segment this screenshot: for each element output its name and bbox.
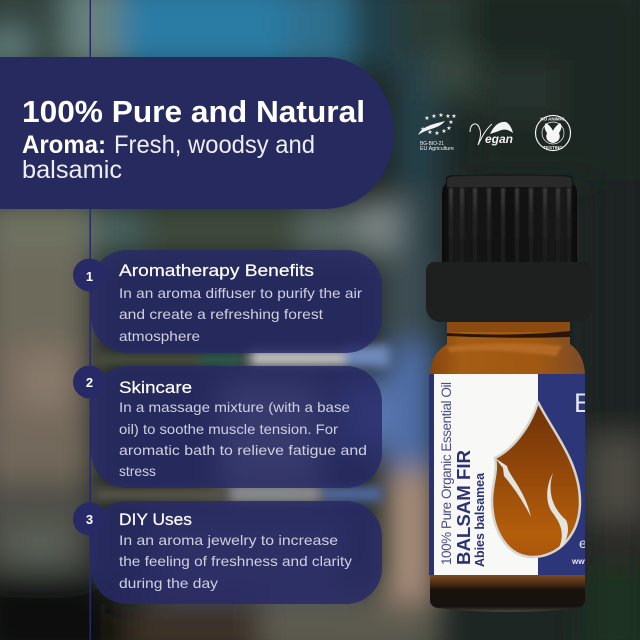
icon: no animal testing: TESTING	[543, 145, 563, 150]
icon: EU organic leaf: ★	[451, 113, 457, 120]
label: rotated product text	[439, 382, 487, 567]
body text: atmosphere	[119, 328, 200, 344]
label: cropped brand text	[572, 394, 585, 564]
aroma description: balsamic	[22, 156, 122, 184]
body text: In a massage mixture (with a base	[119, 399, 350, 415]
number badge 1	[73, 258, 106, 292]
bottle label	[429, 374, 592, 575]
label: cropped brand text: www	[571, 557, 591, 566]
amber neck and shoulder	[430, 320, 585, 376]
heading: Aromatherapy Benefits	[119, 261, 314, 280]
heading: Skincare	[119, 378, 192, 397]
label: rotated product text: BALSAM FIR	[454, 450, 474, 565]
icon: EU organic leaf: ★	[434, 130, 440, 137]
number badge 2	[73, 366, 106, 398]
body text: aromatic bath to relieve fatigue and	[119, 442, 367, 458]
aroma description: Fresh, woodsy and	[114, 131, 315, 159]
icon: vegan logo: egan	[485, 132, 513, 146]
body text: and create a refreshing forest	[119, 306, 323, 322]
icon: EU organic leaf: ★	[448, 119, 454, 126]
bottle cap	[442, 174, 577, 262]
header panel	[0, 57, 394, 209]
aroma description: Aroma:	[22, 131, 106, 159]
vertical timeline line	[90, 0, 91, 640]
icon: EU organic leaf	[418, 112, 457, 152]
icon: EU organic leaf: ★	[424, 115, 430, 122]
icon: EU organic leaf: EU Agriculture	[420, 146, 454, 152]
label: rotated product text: 100% Pure Organic Essential Oil	[439, 382, 454, 565]
icon: vegan logo	[470, 122, 513, 146]
icon: EU organic leaf: ★	[441, 128, 447, 135]
icon: no animal testing: NO ANIMAL	[540, 116, 566, 122]
body text: In an aroma jewelry to increase	[119, 532, 338, 548]
icon: EU organic leaf: ★	[438, 112, 444, 119]
body text: oil) to soothe muscle tension. For	[119, 421, 338, 437]
label: cropped brand text: e	[579, 535, 587, 551]
body text: during the day	[119, 575, 218, 591]
product bottle	[426, 174, 592, 612]
number badge 2: 2	[86, 375, 93, 390]
icon: no animal testing	[536, 116, 570, 150]
label: cropped brand text: E	[574, 388, 592, 418]
amber glass base	[430, 575, 585, 612]
label: oil drop	[492, 402, 580, 557]
body text: the feeling of freshness and clarity	[119, 553, 352, 569]
number badge 3	[73, 502, 106, 536]
body text	[119, 285, 362, 344]
icon: EU organic leaf: ★	[427, 129, 433, 136]
number badge 1: 1	[86, 269, 93, 284]
aroma description	[22, 131, 315, 184]
icon: EU organic leaf: BG-BIO-21	[420, 141, 444, 147]
body text: stress	[119, 463, 156, 479]
body text	[119, 399, 367, 479]
body text: In an aroma diffuser to purify the air	[119, 285, 362, 301]
card 3: DIY uses	[73, 501, 382, 604]
card 2: skincare	[73, 366, 382, 488]
bottle collar	[426, 262, 592, 322]
body text	[119, 532, 352, 591]
number badge 3: 3	[86, 512, 93, 527]
title: 100% Pure and Natural	[22, 94, 365, 129]
icon: EU organic leaf: ★	[420, 126, 426, 133]
card 1: aromatherapy benefits	[73, 250, 382, 353]
heading: DIY Uses	[119, 510, 192, 529]
label: rotated product text: Abies balsamea	[472, 472, 487, 567]
icon: EU organic leaf: ★	[431, 113, 437, 120]
icon: EU organic leaf: ★	[445, 113, 451, 120]
icon: EU organic leaf: ★	[446, 125, 452, 132]
